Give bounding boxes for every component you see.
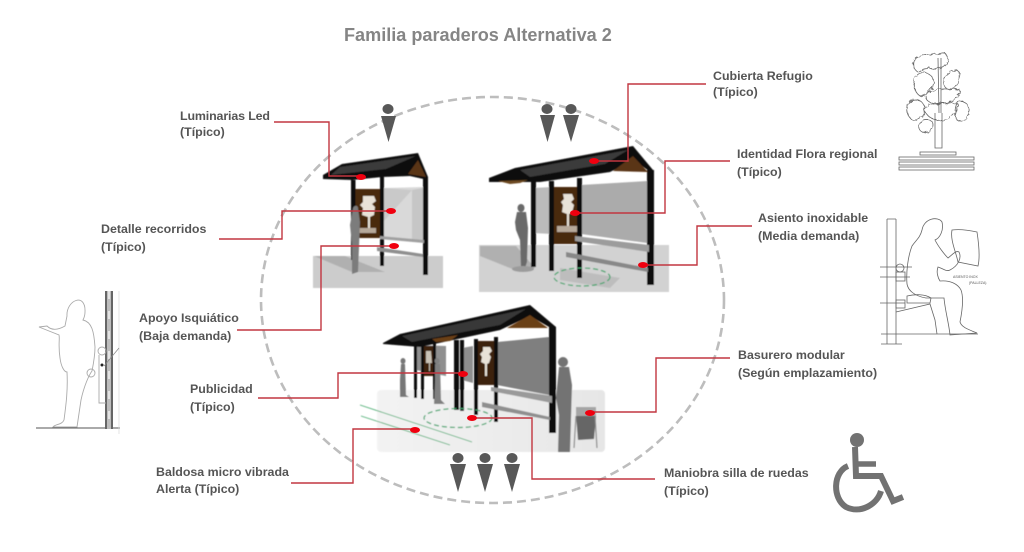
shelter: small stop: [313, 153, 443, 288]
callout: Baldosa micro vibrada: Baldosa micro vibrada: [156, 465, 289, 479]
callout: Detalle recorridos: [101, 208, 396, 254]
callout: Cubierta Refugio: Cubierta Refugio: [713, 69, 813, 83]
callout: Baldosa micro vibrada: Alerta (Típico): [156, 482, 239, 496]
icon: standing person section: [36, 291, 120, 434]
callout: Asiento inoxidable: Asiento inoxidable: [758, 211, 868, 225]
callout: Maniobra silla de ruedas: Maniobra silla de ruedas: [664, 466, 809, 480]
icon: tree elevation: [899, 53, 974, 170]
dashed circle: [261, 97, 724, 503]
callout: Maniobra silla de ruedas: (Típico): [664, 484, 709, 498]
icon: seated person section: [880, 219, 986, 344]
callout: Baldosa micro vibrada: [156, 427, 420, 496]
callout: Maniobra silla de ruedas: [467, 415, 809, 498]
callout: Asiento inoxidable: (Media demanda): [758, 229, 859, 243]
icon: seated person section: (PALLEZA): [969, 281, 986, 285]
callout: Basurero modular: Basurero modular: [738, 348, 845, 362]
icon: two people: [540, 104, 579, 142]
icon: wheelchair: [836, 433, 903, 509]
title: Familia paraderos Alternativa 2: [344, 25, 612, 45]
callout: Cubierta Refugio: [589, 69, 813, 164]
shelter: medium stop: [479, 146, 669, 292]
icon: three people: [450, 453, 520, 492]
icon: seated person section: ASIENTO INOX: [953, 275, 978, 279]
callout: Basurero modular: [585, 348, 877, 416]
callout: Publicidad: (Típico): [190, 400, 235, 414]
callout: Publicidad: [190, 371, 468, 414]
callout: Detalle recorridos: Detalle recorridos: [101, 222, 206, 236]
callout: Apoyo Isquiático: (Baja demanda): [139, 329, 231, 343]
callout: Luminarias Led: Luminarias Led: [180, 109, 270, 123]
callout: Luminarias Led: (Típico): [180, 125, 225, 139]
callout: Detalle recorridos: (Típico): [101, 240, 146, 254]
callout: Identidad Flora regional: [570, 147, 877, 216]
callout: Apoyo Isquiático: [139, 243, 399, 343]
callout: Asiento inoxidable: [638, 211, 868, 268]
shelter: large stop: [360, 305, 605, 452]
icon: one person: [381, 104, 396, 142]
callout: Publicidad: Publicidad: [190, 382, 253, 396]
callout: Cubierta Refugio: (Típico): [713, 85, 758, 99]
callout: Luminarias Led: [180, 109, 366, 180]
callout: Identidad Flora regional: (Típico): [737, 165, 782, 179]
callout: Apoyo Isquiático: Apoyo Isquiático: [139, 311, 239, 325]
callout: Identidad Flora regional: Identidad Flora regional: [737, 147, 877, 161]
callout: Basurero modular: (Según emplazamiento): [738, 366, 877, 380]
